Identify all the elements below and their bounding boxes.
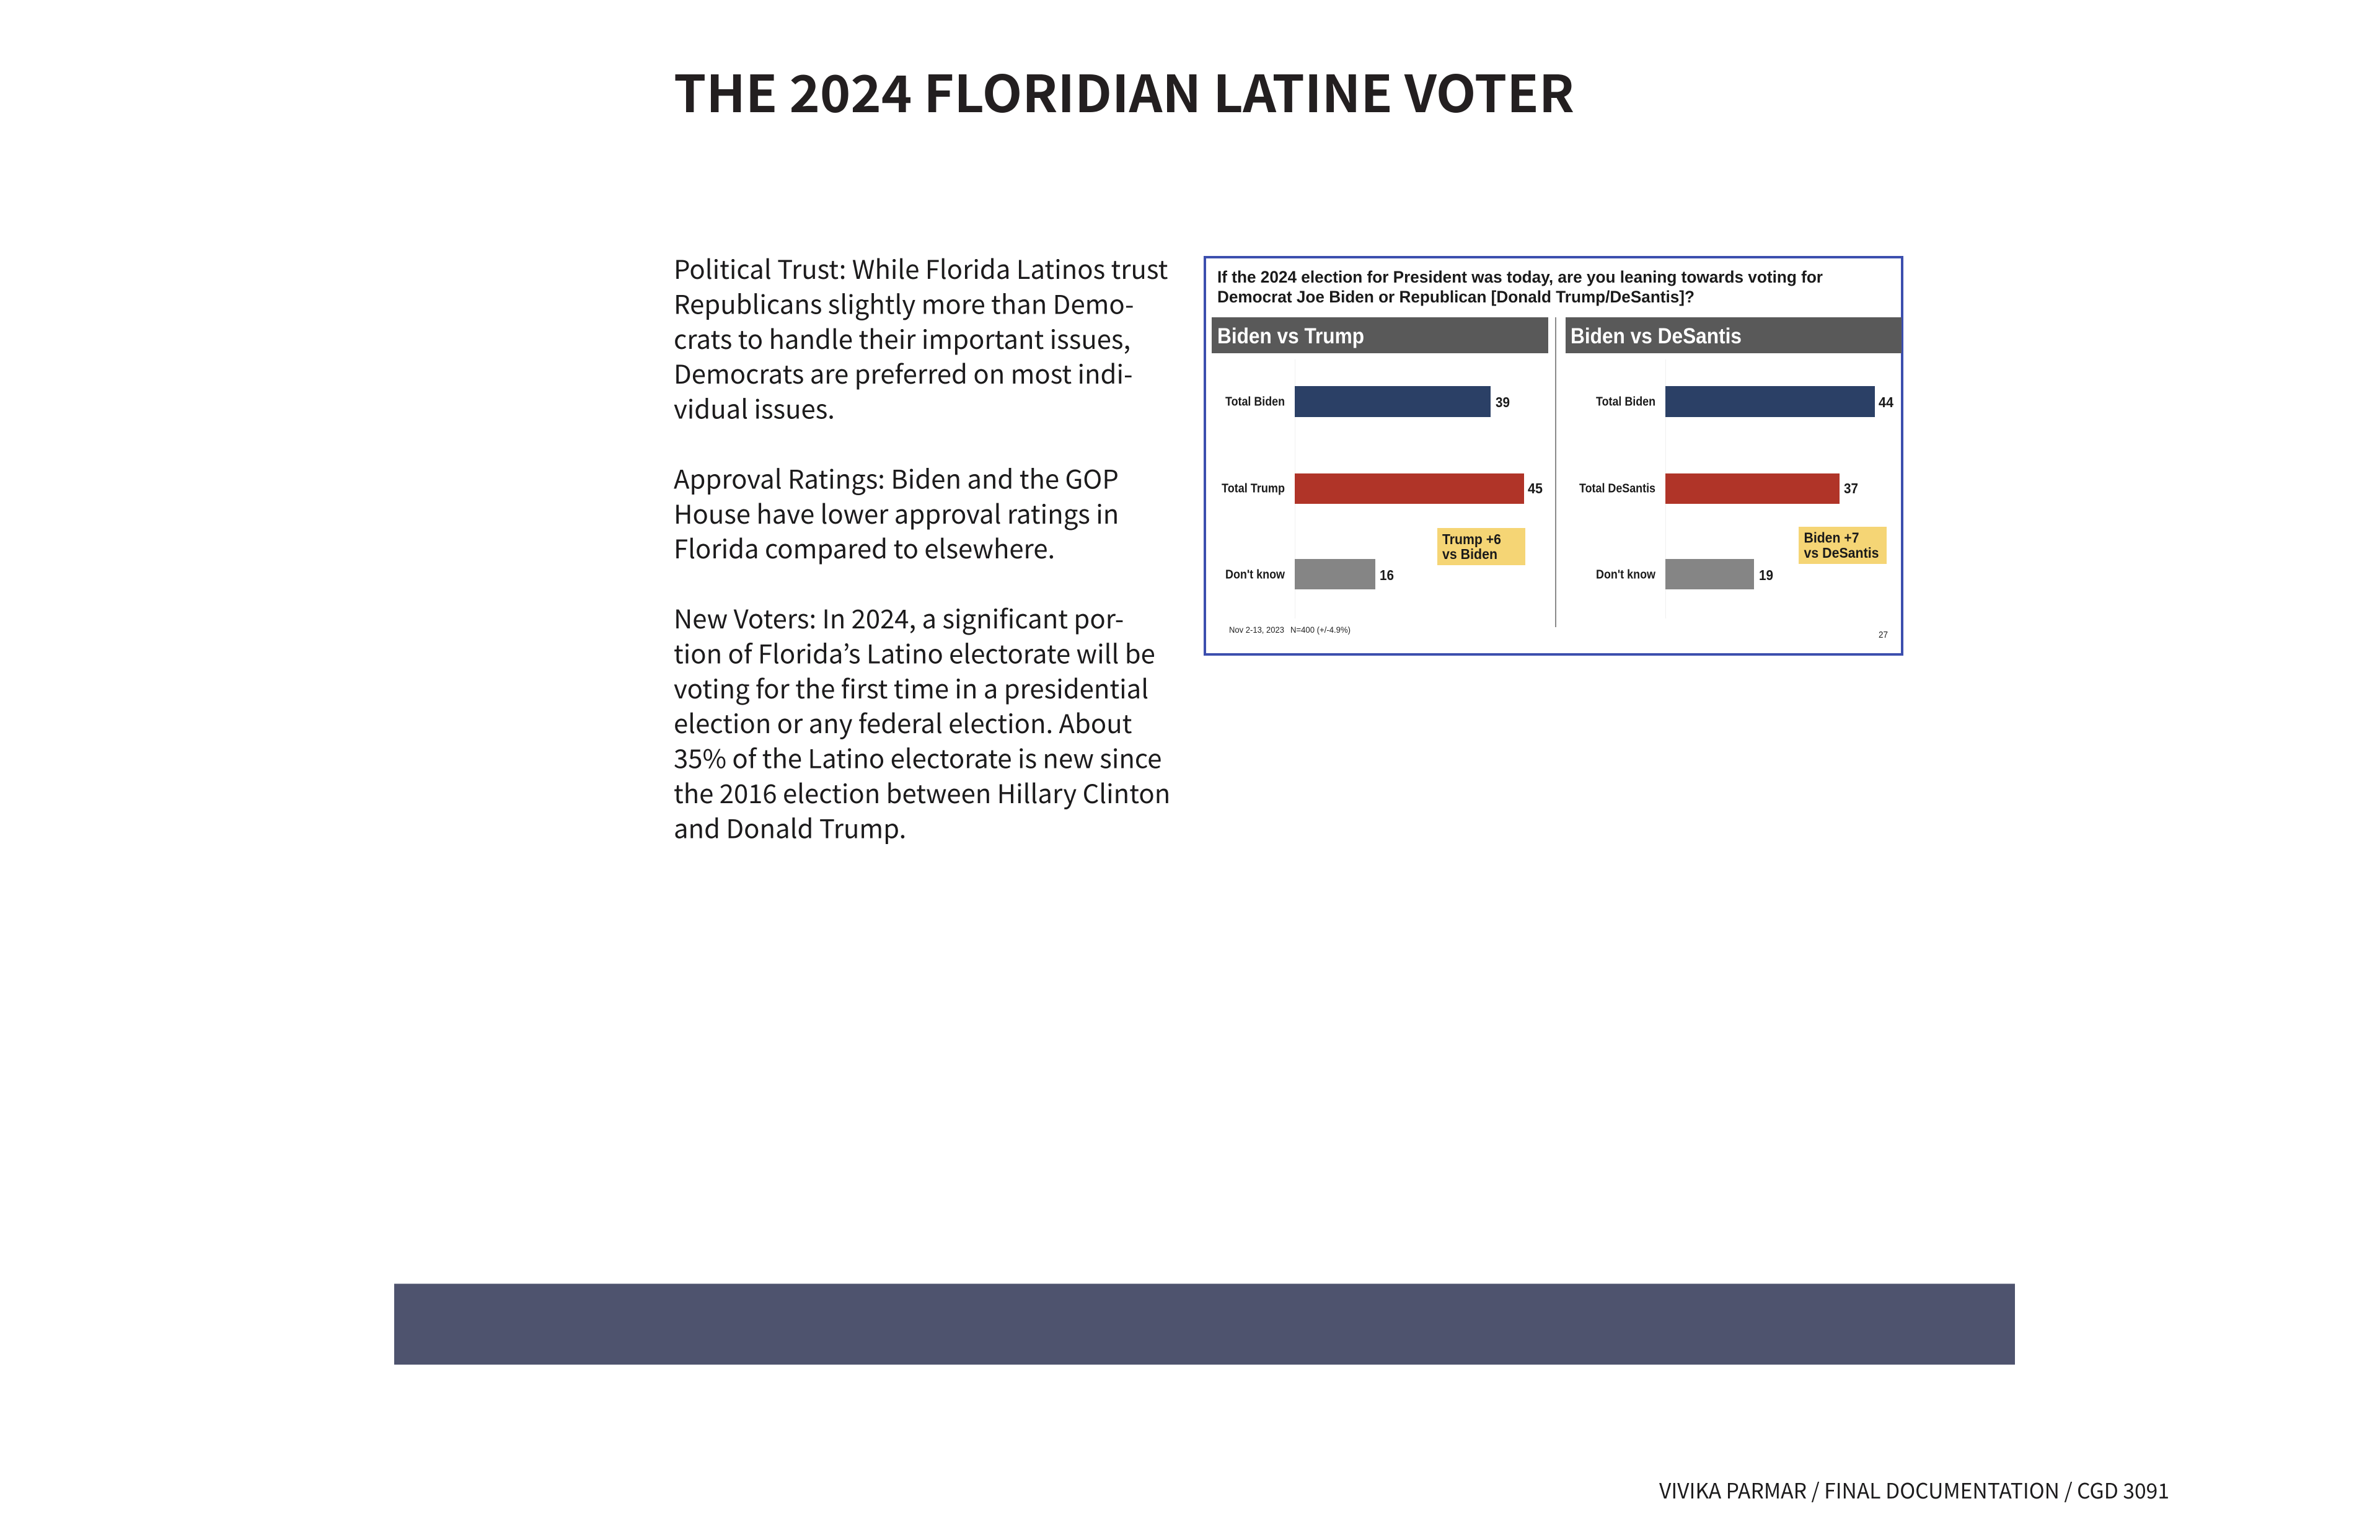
bar: Total Trump 45: 45 (1528, 480, 1543, 496)
paragraph: new voters: and Donald Trump. (674, 808, 906, 846)
chart footnote (1229, 625, 1351, 635)
paragraph: political trust: crats to handle their important issues, (674, 319, 1130, 357)
bar: Don't know 19 (1596, 559, 1773, 589)
bar: Total Trump 45 (1222, 473, 1543, 504)
paragraph: new voters: election or any federal election. About (674, 703, 1132, 741)
divider (1555, 317, 1556, 627)
paragraph: new voters: New Voters: In 2024, a significant por- (674, 599, 1124, 636)
bar: Don't know 19: Don't know (1596, 568, 1655, 581)
callout: Biden +7: vs DeSantis (1804, 545, 1879, 561)
callout: Trump +6 (1437, 528, 1525, 565)
bar: Don't know 16: 16 (1380, 567, 1394, 583)
bar: Total DeSantis 37: 37 (1844, 480, 1858, 496)
bar: Total Trump 45: Total Trump (1222, 482, 1285, 496)
bar: Don't know 19: 19 (1759, 567, 1773, 583)
bar: Total Biden 39: 39 (1496, 394, 1510, 410)
poll question (1217, 268, 1823, 306)
bar: Total Biden 44: 44 (1879, 394, 1893, 410)
bar: Total DeSantis 37: Total DeSantis (1579, 482, 1655, 496)
paragraph: new voters: 35% of the Latino electorate is new since (674, 739, 1161, 777)
paragraph: political trust: Republicans slightly more than Demo- (674, 284, 1134, 322)
bar: Total Biden 39: Total Biden (1225, 395, 1285, 409)
bar: Total Biden 44 (1596, 386, 1893, 417)
footer credit: VIVIKA PARMAR / FINAL DOCUMENTATION / CGD 3091 (1659, 1474, 2169, 1505)
paragraph: approval ratings: Florida compared to elsewhere. (674, 529, 1055, 566)
bar: Total Biden 39 (1225, 386, 1510, 417)
bar: Total Biden 44: Total Biden (1596, 395, 1655, 409)
paragraph: political trust: Political Trust: While Florida Latinos trust (674, 249, 1168, 287)
title: THE 2024 FLORIDIAN LATINE VOTER (674, 53, 1574, 127)
paragraph: new voters: tion of Florida’s Latino electorate will be (674, 633, 1155, 671)
paragraph: political trust: Democrats are preferred on most indi- (674, 354, 1133, 392)
header: Biden vs DeSantis (1566, 317, 1902, 353)
poll question: Democrat Joe Biden or Republican [Donald Trump/DeSantis]? (1217, 288, 1695, 306)
paragraph: new voters: voting for the first time in a presidential (674, 669, 1148, 706)
poll question: If the 2024 election for President was today, are you leaning towards voting for (1217, 268, 1823, 286)
paragraph: approval ratings: Approval Ratings: Biden and the GOP (674, 459, 1119, 496)
callout: Biden +7 (1799, 527, 1887, 564)
bar: Total DeSantis 37 (1579, 473, 1858, 504)
paragraph: approval ratings: House have lower approval ratings in (674, 494, 1119, 532)
callout: Trump +6: vs Biden (1442, 546, 1497, 562)
header: Biden vs Trump (1212, 317, 1548, 353)
bar: Don't know 16: Don't know (1225, 568, 1285, 581)
header: Biden vs DeSantis: Biden vs DeSantis (1571, 324, 1742, 348)
callout: Biden +7: Biden +7 (1804, 529, 1859, 545)
paragraph: approval ratings (674, 459, 1119, 566)
chart footnote: N=400 (+/-4.9%) (1290, 625, 1351, 635)
chart: Biden vs DeSantis (1566, 317, 1902, 618)
text block: body copy (674, 249, 1170, 846)
paragraph: political trust: vidual issues. (674, 389, 835, 427)
bar: Don't know 16 (1225, 559, 1394, 589)
page number: 27 (1879, 630, 1888, 640)
paragraph: new voters (674, 599, 1170, 846)
panel: poll chart (1205, 257, 1902, 654)
paragraph: political trust (674, 249, 1168, 427)
band (394, 1284, 2015, 1365)
header: Biden vs Trump: Biden vs Trump (1217, 324, 1364, 348)
chart footnote: Nov 2-13, 2023 (1229, 625, 1284, 635)
chart: Biden vs Trump (1212, 317, 1548, 618)
paragraph: new voters: the 2016 election between Hillary Clinton (674, 773, 1170, 811)
callout: Trump +6: Trump +6 (1442, 531, 1501, 547)
